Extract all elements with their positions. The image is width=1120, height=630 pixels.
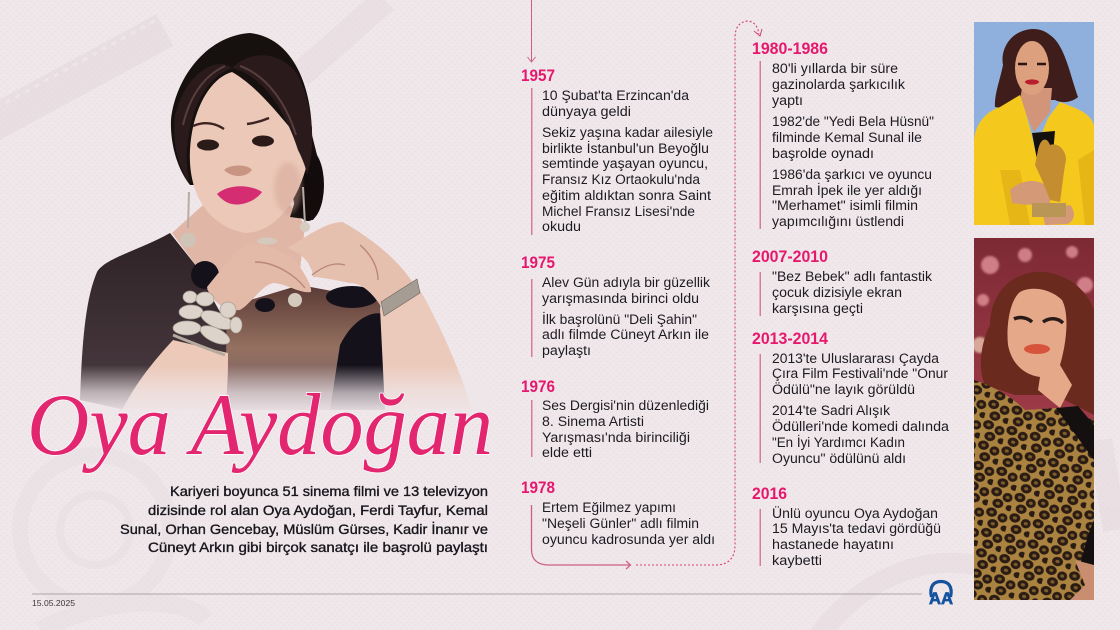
black lace <box>191 252 388 410</box>
eyes <box>1014 318 1063 323</box>
black top <box>1056 406 1094 565</box>
center chest <box>225 285 387 410</box>
neck and chest skin <box>172 205 305 278</box>
entry: 2013-2014: 2014'te Sadri Alışık <box>772 403 890 418</box>
face and neck <box>1008 289 1072 408</box>
entry: 2007-2010: "Bez Bebek" adlı fantastik <box>772 269 932 284</box>
cheek shading <box>274 162 302 214</box>
entry: 1978: Ertem Eğilmez yapımı <box>542 500 676 515</box>
bracelets <box>173 291 242 348</box>
trophy base <box>1032 203 1066 217</box>
entry: 1957: dünyaya geldi <box>542 104 631 119</box>
entry: 1978: 1978 <box>521 479 555 497</box>
entry: 1980-1986: 80'li yıllarda bir süre <box>772 61 898 76</box>
entry: 1980-1986: "Merhamet" isimli filmin <box>772 198 918 213</box>
entry: 1980-1986: 1986'da şarkıcı ve oyuncu <box>772 167 932 182</box>
entry: 1957 <box>521 67 713 235</box>
entry: 1975: paylaştı <box>542 343 591 358</box>
entry: 1980-1986: 1980-1986 <box>752 40 828 58</box>
entry: 1957: Sekiz yaşına kadar ailesiyle <box>542 125 713 140</box>
watch bracelet <box>381 279 420 316</box>
hair <box>981 272 1094 415</box>
jacket shading <box>1000 150 1094 225</box>
trophy <box>1035 140 1066 202</box>
entry: 2007-2010: karşısına geçti <box>772 301 863 316</box>
entry: 1976: 1976 <box>521 378 555 396</box>
dress <box>80 233 230 410</box>
entry: 2013-2014: 2013'te Uluslararası Çayda <box>772 351 939 366</box>
bottom fade <box>60 365 490 415</box>
entry: 1980-1986: Emrah İpek ile yer aldığı <box>772 183 922 198</box>
right arm <box>380 290 472 410</box>
face <box>1015 41 1049 95</box>
lips <box>1024 344 1050 354</box>
entry: 2016: Ünlü oyuncu Oya Aydoğan <box>772 506 938 521</box>
stage lights <box>972 246 1093 353</box>
hair <box>995 29 1078 108</box>
entry: 1978: "Neşeli Günler" adlı filmin <box>542 516 699 531</box>
entry: 2016: 2016 <box>752 485 787 503</box>
finger shading <box>255 245 378 288</box>
entry: 2016 <box>752 485 941 568</box>
entry: 2013-2014: Çıra Film Festivali'nde "Onur <box>772 366 949 381</box>
entry: 1975: adlı filmde Cüneyt Arkın ile <box>542 327 709 342</box>
right hand <box>287 222 413 305</box>
entry: 1978: oyuncu kadrosunda yer aldı <box>542 532 715 547</box>
hair bun <box>292 149 324 221</box>
footer rule <box>32 594 922 595</box>
entry: 2013-2014 <box>752 330 950 466</box>
photo: yellow jacket with trophy <box>974 22 1094 225</box>
entry: 1978 <box>521 479 715 547</box>
entry: 1957: Fransız Kız Ortaokulu'nda <box>542 172 700 187</box>
entry: 1976: Ses Dergisi'nin düzenlediği <box>542 398 709 413</box>
entry: 1980-1986: yapımcılığını üstlendi <box>772 214 904 229</box>
timeline arrow: top <box>528 0 536 62</box>
entry: 1957: eğitim aldıktan sonra Saint <box>542 188 711 203</box>
earrings <box>180 187 310 248</box>
entry: 1957: semtinde yaşayan oyuncu, <box>542 156 708 171</box>
entry: 2013-2014: Oyuncu" ödülünü aldı <box>772 451 906 466</box>
AA logo: AA <box>929 589 953 608</box>
entry: 1976: elde etti <box>542 445 592 460</box>
entry: 1976 <box>521 378 709 460</box>
eyebrows <box>193 118 269 129</box>
entry: 2007-2010: çocuk dizisiyle ekran <box>772 285 902 300</box>
face <box>190 72 308 233</box>
entry: 1975: 1975 <box>521 254 555 272</box>
photo: leopard jacket <box>972 238 1094 600</box>
hair back <box>171 33 323 220</box>
lips <box>217 186 262 204</box>
hands <box>1010 181 1074 225</box>
hair highlights <box>183 66 296 135</box>
title: Oya Aydoğan <box>27 377 493 474</box>
eyes and lips <box>1018 63 1046 65</box>
entry: 1957: 1957 <box>521 67 555 85</box>
entry: 2007-2010: 2007-2010 <box>752 248 828 266</box>
entry: 2013-2014: Ödülü"ne layık görüldü <box>772 382 915 397</box>
entry: 1980-1986: yaptı <box>772 93 803 108</box>
entry: 1980-1986: gazinolarda şarkıcılık <box>772 77 905 92</box>
entry: 1980-1986: 1982'de "Yedi Bela Hüsnü" <box>772 114 934 129</box>
nose shadow <box>224 166 252 176</box>
entry: 2013-2014: 2013-2014 <box>752 330 829 348</box>
entry: 2007-2010 <box>752 248 932 316</box>
entry: 1980-1986 <box>752 40 934 229</box>
left hand <box>207 243 311 310</box>
entry: 1976: 8. Sinema Artisti <box>542 414 644 429</box>
entry: 1976: Yarışması'nda birinciliği <box>542 430 690 445</box>
entry: 1957: 10 Şubat'ta Erzincan'da <box>542 88 690 103</box>
leopard jacket <box>974 380 1094 600</box>
entry: 1975: yarışmasında birinci oldu <box>542 291 699 306</box>
entry: 1975: Alev Gün adıyla bir güzellik <box>542 275 710 290</box>
intro text: Sunal, Orhan Gencebay, Müslüm Gürses, Kadir İnanır ve <box>120 522 488 537</box>
yellow jacket <box>974 95 1094 225</box>
timeline connector <box>532 21 762 569</box>
intro text: Kariyeri boyunca 51 sinema filmi ve 13 televizyon <box>170 484 488 499</box>
entry: 2013-2014: "En İyi Yardımcı Kadın <box>772 435 905 450</box>
entry: 2016: kaybetti <box>772 553 822 568</box>
entry: 2016: hastanede hayatını <box>772 537 894 552</box>
hair fringe <box>174 55 312 185</box>
entry: 1980-1986: filminde Kemal Sunal ile <box>772 130 922 145</box>
intro text <box>120 484 488 555</box>
thin bracelet <box>173 335 225 355</box>
intro text: dizisinde rol alan Oya Aydoğan, Ferdi Tayfur, Kemal <box>148 503 488 518</box>
left forearm <box>122 340 228 410</box>
hand <box>1070 560 1094 600</box>
ring and pendant <box>257 238 302 307</box>
neck <box>1020 88 1052 132</box>
entry: 1957: Michel Fransız Lisesi'nde <box>542 204 695 219</box>
date: 15.05.2025 <box>32 598 75 608</box>
portrait of Oya Aydoğan <box>60 33 490 415</box>
eyes <box>197 136 274 150</box>
black top <box>1032 131 1055 158</box>
entry: 1975: İlk başrolünü "Deli Şahin" <box>542 312 697 327</box>
entry: 1975 <box>521 254 710 358</box>
entry: 2013-2014: Ödülleri'nde komedi dalında <box>772 419 950 434</box>
intro text: Cüneyt Arkın gibi birçok sanatçı ile başrolü paylaştı <box>148 540 488 555</box>
entry: 1957: birlikte İstanbul'un Beyoğlu <box>542 141 709 156</box>
entry: 1957: okudu <box>542 219 581 234</box>
entry: 1980-1986: başrolde oynadı <box>772 146 874 161</box>
entry: 2016: 15 Mayıs'ta tedavi gördüğü <box>772 521 941 536</box>
